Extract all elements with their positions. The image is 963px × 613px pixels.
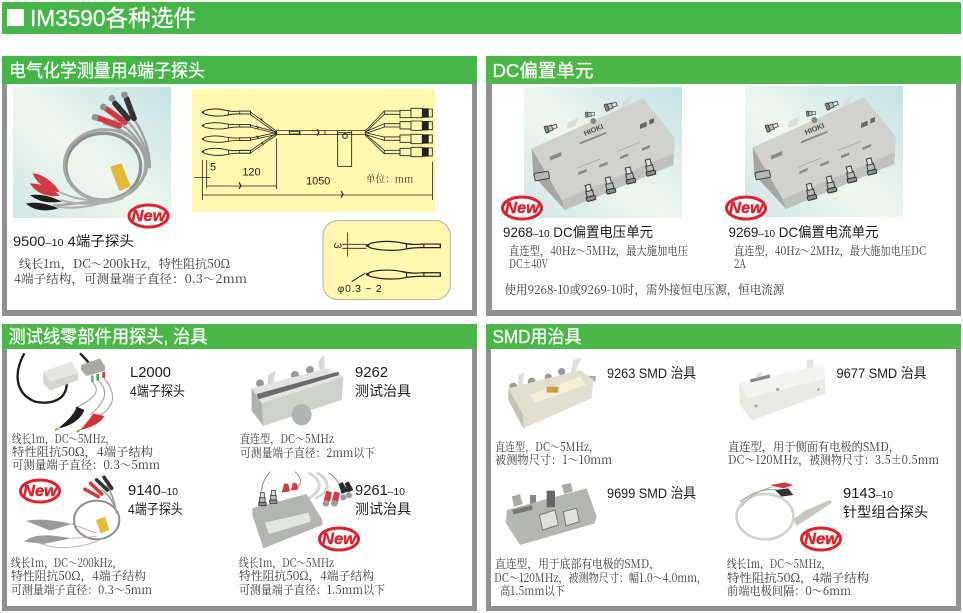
description: 9262: 可测量端子直径：2mm以下: [240, 444, 375, 461]
description: 9500-10: 4端子结构，可测量端子直径：0.3～2mm: [14, 270, 247, 287]
description: L2000: 特性阻抗50Ω，4端子结构: [12, 443, 153, 460]
description: 9699: 高1.5mm以下: [500, 582, 565, 599]
description: 9268-10: DC±40V: [509, 255, 548, 272]
description: 9699: [494, 555, 707, 599]
description: 9140-10: 特性阻抗50Ω，4端子结构: [11, 567, 146, 584]
description: 9677: [728, 438, 939, 468]
title bar: IM3590各种选件: [30, 5, 196, 31]
description: 9140-10: 线长1m，DC～200kHz，: [11, 554, 122, 571]
description: 9261-10: 线长1m，DC～5MHz: [239, 554, 334, 571]
description: L2000: [12, 430, 160, 473]
badge: New: New: [505, 200, 541, 217]
badge: New: New: [804, 531, 840, 548]
label: dimension 3: 3: [331, 243, 343, 249]
description: 9143-10: 前端电极间隔：0～6mm: [727, 582, 851, 599]
product name: 9262: 9262: [355, 364, 388, 381]
photo: 9268-10: [524, 87, 682, 218]
description: 9143-10: 线长1m，DC～5MHz，: [727, 555, 831, 572]
heading: SMD fixtures: SMD用治具: [492, 327, 582, 347]
product name: 9699: 9699 SMD 治具: [607, 485, 696, 501]
badge: New: [20, 480, 60, 502]
description: 9269-10: 2A: [734, 255, 746, 272]
connectors: BNC ends: [384, 108, 432, 157]
badge: New: [726, 197, 766, 219]
photo: 9269-10: [745, 86, 903, 217]
product name: 9500-10: 9500–10 4端子探头: [13, 233, 134, 249]
label: diameter: φ0.3 ~ 2: [338, 284, 382, 295]
label: unit mm: 单位：mm: [366, 172, 414, 186]
description: 9500-10: 线长1m，DC～200kHz，特性阻抗50Ω: [19, 255, 230, 272]
badge: New: New: [729, 200, 765, 217]
description: 9263: [495, 438, 612, 468]
description: 9263: 被测物尺寸：1～10mm: [495, 451, 612, 468]
label: dimension 1050: 1050: [306, 176, 330, 188]
badge: New: [129, 205, 168, 227]
product name: 9261-10: 测试治具: [355, 501, 411, 517]
product name: L2000: 4端子探头: [130, 383, 185, 399]
product name: 9268-10: 9268–10 DC偏置电压单元: [503, 224, 653, 240]
photo: 9143-10: [737, 482, 832, 539]
product name: 9140-10: [128, 482, 183, 517]
description: 9143-10: [727, 555, 869, 599]
description: 9500-10: [14, 255, 247, 287]
description: 9268-10: 直连型，40Hz～5MHz，最大施加电压: [509, 242, 688, 259]
photo: 9262 fixture: [252, 355, 343, 426]
description: L2000: 线长1m，DC～5MHz，: [12, 430, 115, 447]
description: 9140-10: [11, 554, 152, 598]
description: 9677: DC～120MHz，被测物尺寸：3.5±0.5mm: [728, 451, 939, 468]
label: dimension 5: 5: [210, 162, 216, 174]
photo: L2000: [18, 353, 113, 432]
description: 9261-10: [239, 554, 385, 598]
product name: 9143-10: 9143–10: [843, 485, 893, 502]
product name: 9262: 测试治具: [355, 383, 411, 399]
description: 9269-10: 直连型，40Hz～2MHz，最大施加电压DC: [734, 242, 926, 259]
photo: 9140-10: [24, 477, 119, 548]
product name: 9261-10: 9261–10: [355, 482, 405, 499]
description: 9699: DC～120MHz，被测物尺寸：幅1.0～4.0mm，: [494, 569, 707, 586]
badge: New: [802, 528, 840, 550]
product name: 9140-10: 4端子探头: [128, 501, 183, 517]
badge: New: New: [23, 483, 59, 500]
product name: 9677: 9677 SMD 治具: [836, 365, 926, 381]
heading: electrochemical probe: 电气化学测量用4端子探头: [9, 61, 205, 81]
product name: 9263: 9263 SMD 治具: [607, 365, 696, 381]
product name: 9262: [355, 364, 411, 399]
product name: 9143-10: [843, 485, 928, 520]
dimension diagram: clip detail: [323, 221, 450, 300]
badge: New: New: [322, 531, 358, 548]
badge: New: [320, 528, 358, 550]
description: 9269-10: [734, 242, 926, 272]
heading: DC bias: DC偏置单元: [492, 61, 594, 81]
description: 9677: 直连型，用于侧面有电极的SMD，: [728, 438, 900, 455]
panel: electrochemical 4-terminal probe: [2, 56, 477, 316]
product name: L2000: L2000: [130, 364, 171, 381]
description: 9140-10: 可测量端子直径：0.3～5mm: [11, 581, 152, 598]
description: L2000: 可测量端子直径：0.3～5mm: [12, 456, 160, 473]
panel: SMD fixtures: [486, 324, 961, 611]
description: 9262: [240, 430, 375, 461]
description: 9261-10: 可测量端子直径：1.5mm以下: [239, 581, 385, 598]
photo: 9261-10: [252, 472, 353, 548]
badge: New: New: [132, 208, 167, 225]
product name: 9143-10: 针型组合探头: [843, 504, 928, 520]
description: 9268-10: [509, 242, 688, 272]
photo: 9500-10 probe: [13, 87, 171, 218]
product name: 9261-10: [355, 482, 411, 517]
photo: 9263: [508, 357, 596, 428]
title bar: [2, 2, 961, 34]
product name: L2000: [130, 364, 185, 399]
panel: probes and fixtures for test leads: [2, 324, 477, 611]
description: 9699: 直连型，用于底部有电极的SMD，: [495, 555, 660, 572]
panel: DC bias units: [486, 56, 961, 316]
product name: 9140-10: 9140–10: [128, 482, 178, 499]
note: external source: 使用9268-10或9269-10时，需外接恒电压源，恒电流源: [504, 280, 785, 298]
photo: 9699: [506, 483, 597, 545]
description: 9262: 直连型，DC～5MHz: [240, 430, 334, 447]
description: 9263: 直连型，DC～5MHz，: [495, 438, 599, 455]
label: dimension 120: 120: [242, 167, 261, 179]
dimension diagram: full probe: [192, 89, 435, 212]
product name: 9269-10: 9269–10 DC偏置电流单元: [728, 224, 878, 240]
description: 9143-10: 特性阻抗50Ω，4端子结构: [727, 569, 869, 586]
heading: probes and fixtures: 测试线零部件用探头, 治具: [8, 327, 208, 347]
badge: New: [502, 197, 542, 219]
photo: 9677: [739, 359, 826, 421]
description: 9261-10: 特性阻抗50Ω，4端子结构: [239, 567, 374, 584]
